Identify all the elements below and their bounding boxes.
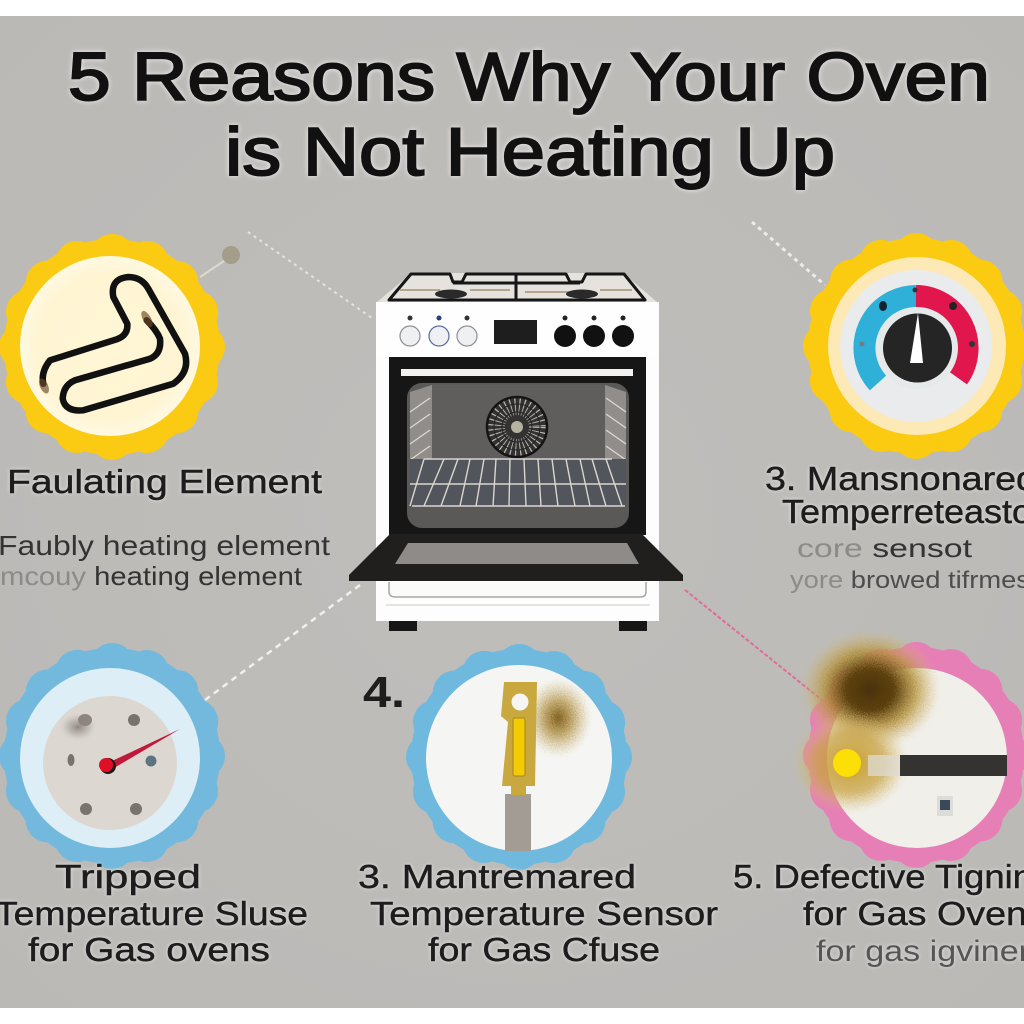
oven rack <box>410 459 626 507</box>
text: reason 3, top right: core sensot <box>797 533 973 563</box>
lower drawer <box>389 582 646 597</box>
text: reason 1, top left <box>0 463 330 591</box>
scorch marks <box>37 309 155 395</box>
cooktop <box>377 273 657 302</box>
oven window <box>407 383 629 528</box>
title: is Not Heating Up <box>225 114 835 190</box>
icon 2: tripped thermal fuse <box>4 648 220 864</box>
sensor probe stem <box>505 794 531 851</box>
text: reason 2, bottom left: Temperature Sluse <box>0 895 308 932</box>
title <box>68 39 990 190</box>
oven body <box>376 302 659 621</box>
oven cavity frame <box>389 357 646 535</box>
icon 5: defective igniter <box>792 630 1024 863</box>
icon 1: faulty heating element <box>4 239 220 455</box>
icon 3: temperature dial <box>808 238 1024 454</box>
icon: connector pin <box>200 246 240 277</box>
text: reason 5, bottom right <box>733 858 1024 968</box>
text: reason 5, bottom right: for Gas Oven <box>803 895 1024 932</box>
open oven door <box>349 534 683 581</box>
drawer line <box>386 604 650 606</box>
text: reason 1, top left: mcouy heating element <box>0 561 303 591</box>
title: 5 Reasons Why Your Oven <box>68 39 990 115</box>
icon 4: temperature sensor <box>411 649 627 865</box>
text: reason 4, bottom middle: 3. Mantremared <box>358 858 636 895</box>
control panel <box>376 302 659 357</box>
text: reason 3, top right: 3. Mansnonared <box>765 460 1024 497</box>
connector: bottom right <box>685 590 822 700</box>
text: reason 3, top right: yore browed tifrmes <box>790 567 1024 594</box>
text: reason 1, top left: Faulating Element <box>7 463 322 500</box>
text: reason 1, top left: Faubly heating element <box>0 530 330 561</box>
text: reason 3, top right <box>765 460 1024 594</box>
text: number 4: 4. <box>363 668 405 717</box>
feet <box>389 621 647 631</box>
oven fan <box>486 396 548 458</box>
soot smudge <box>524 678 592 758</box>
connector: top right <box>752 222 825 285</box>
text: reason 3, top right: Temperreteasto <box>782 493 1024 530</box>
text: reason 4, bottom middle: Temperature Sensor <box>370 895 718 932</box>
text: reason 4, bottom middle: for Gas Cfuse <box>428 931 660 968</box>
text: reason 2, bottom left <box>0 858 308 968</box>
handle strip <box>401 369 633 376</box>
oven illustration <box>349 273 683 631</box>
text: reason 4, bottom middle <box>358 858 718 968</box>
text: reason 2, bottom left: Tripped <box>55 858 201 895</box>
text: reason 5, bottom right: for gas igviner <box>816 935 1024 968</box>
text: reason 2, bottom left: for Gas ovens <box>28 931 270 968</box>
text: reason 5, bottom right: 5. Defective Tignin <box>733 858 1024 895</box>
connector: top left <box>248 232 372 318</box>
sensor probe head <box>501 682 537 795</box>
connector: bottom left <box>205 585 360 700</box>
